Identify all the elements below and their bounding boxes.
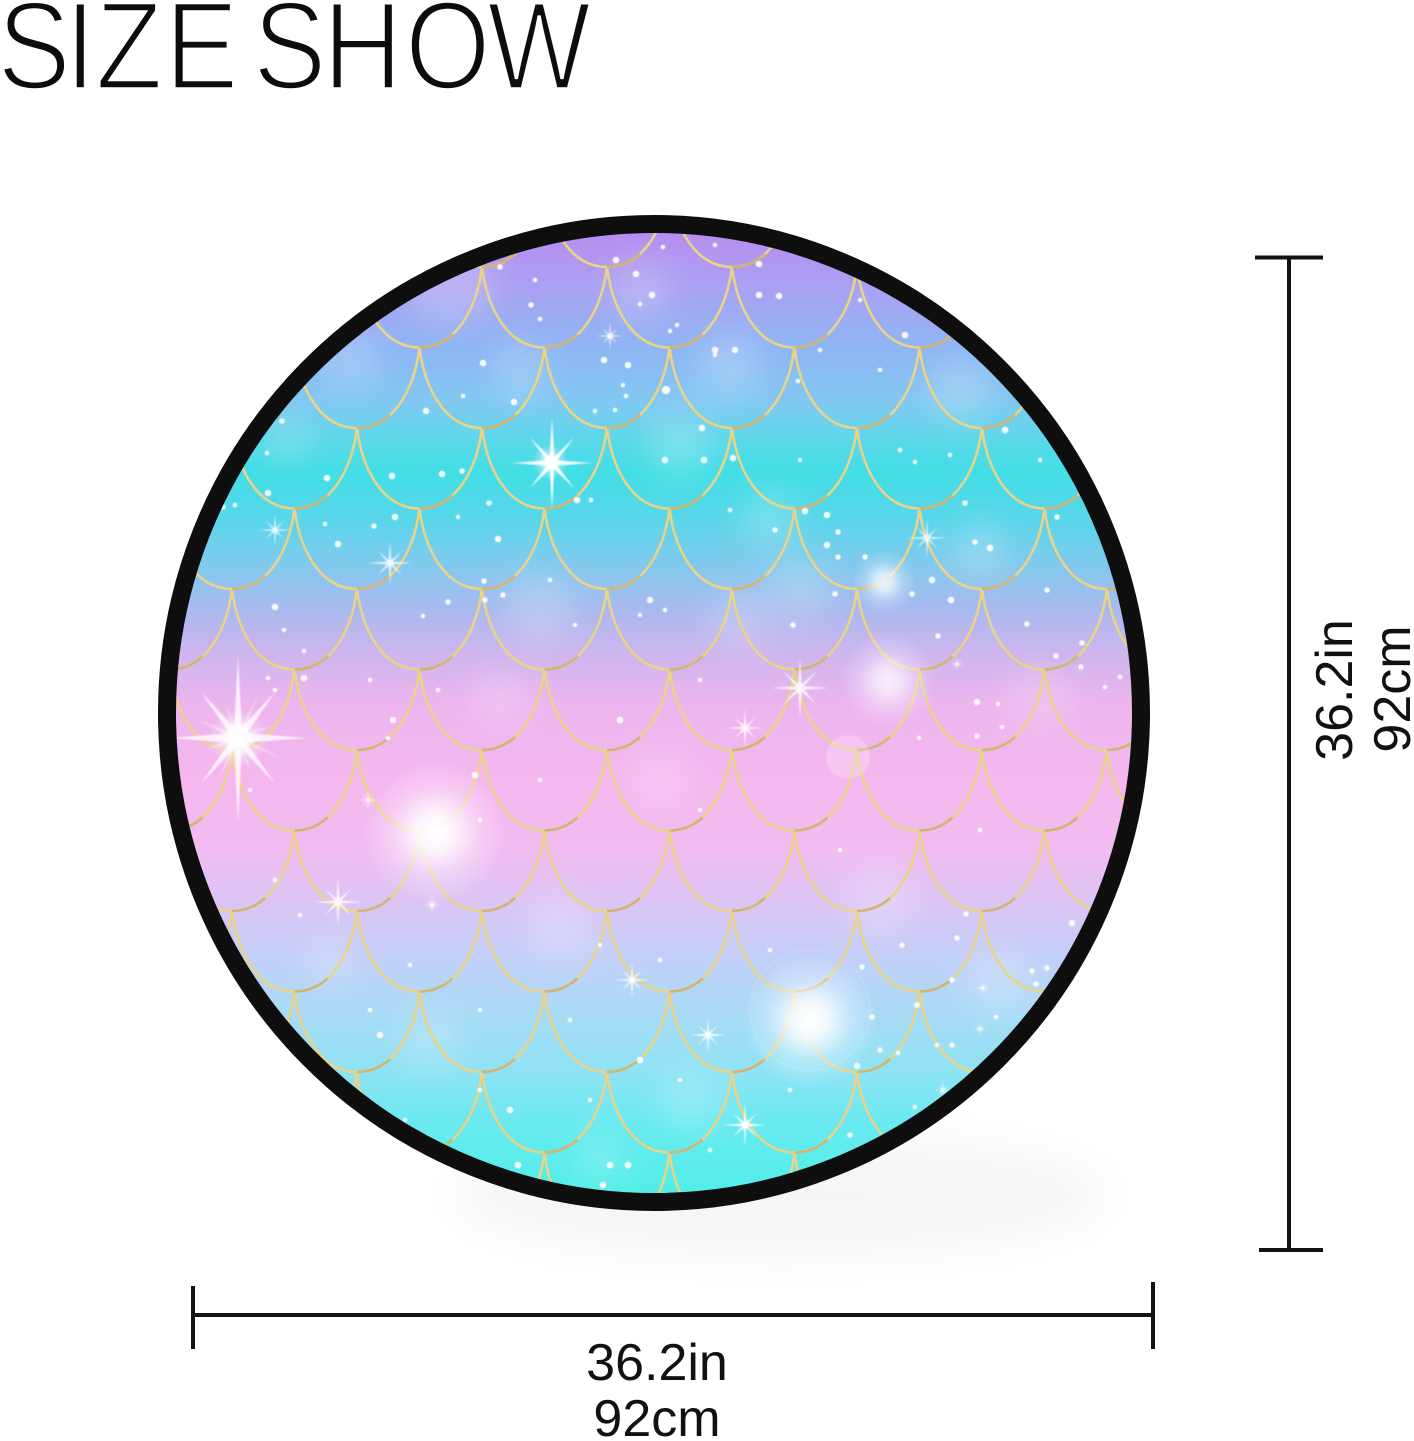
horizontal inches label: 36.2in <box>586 1334 728 1392</box>
black rug border <box>167 224 1141 1202</box>
star sparkles <box>170 322 991 1147</box>
horizontal dimension line <box>191 1282 1155 1349</box>
rug shadow <box>450 1133 1110 1257</box>
round mermaid-scale rug <box>167 224 1141 1202</box>
glowing light flares <box>208 444 936 1088</box>
soft bokeh clouds <box>268 235 1070 1185</box>
vertical inches label: 36.2in <box>1306 619 1364 761</box>
white glitter dots <box>220 243 1122 1188</box>
vertical dimension line <box>1255 256 1323 1252</box>
gold scale outlines <box>170 228 1138 1196</box>
vertical dimension label <box>1306 619 1414 761</box>
horizontal dimension label <box>586 1334 728 1441</box>
rug rainbow surface <box>172 229 1136 1197</box>
